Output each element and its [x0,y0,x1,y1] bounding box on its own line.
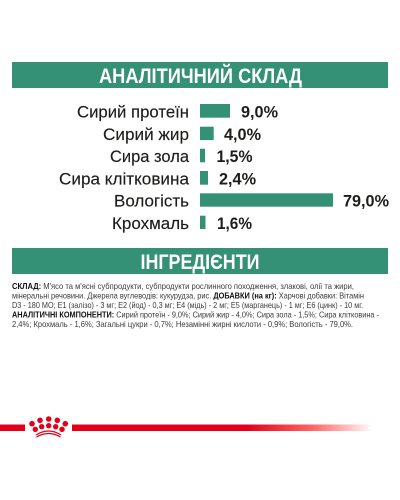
row: moisture [114,193,389,211]
row: crude fat [103,126,261,144]
heading: analytical composition: АНАЛІТИЧНИЙ СКЛАД [99,64,302,88]
row: crude protein: 9,0% [241,104,278,122]
row: crude ash: Сира зола [110,148,190,166]
row: starch [112,215,252,233]
row: crude protein: Сирий протеїн [77,104,189,122]
text block: composition details [12,282,379,329]
bar chart: composition [59,104,389,233]
row: crude fibre: Сира клітковина [59,170,190,188]
row: crude ash [110,148,253,166]
heading: ingredients [12,248,388,274]
row: crude ash: 1,5% [216,148,253,166]
row: crude fat: 4,0% [224,126,261,144]
row: starch: 1,6% [217,215,252,233]
text block: composition details: D3 - 180 МО; Е1 (залізо) - 3 мг; Е2 (йод) - 0,3 мг; Е4 (мідь) - 2 мг; Е5 (марганець) - 1 мг; Е6 (цинк) - 10 мг. [12,301,363,310]
footer red line [0,424,373,431]
icon: royal crown logo [29,416,68,437]
heading: analytical composition [12,62,388,88]
row: moisture: 79,0% [343,193,389,211]
row: crude fibre [59,170,256,188]
row: crude protein [77,104,278,122]
text block: composition details: мінеральні речовини. Джерела вуглеводів: кукурудза, рис. ДОБАВКИ (на кг): Харчові добавки: Вітамін [12,292,364,300]
text block: composition details: АНАЛІТИЧНІ КОМПОНЕНТИ: Сирий протеїн - 9,0%; Сирий жир - 4,0%; Сира зола - 1,5%; Сира клітковина - [12,310,379,320]
row: crude fibre: 2,4% [219,170,256,188]
row: crude fat: Сирий жир [103,126,189,144]
row: moisture: Вологість [114,193,189,211]
text block: composition details: 2,4%; Крохмаль - 1,6%; Загальні цукри - 0,7%; Незамінні жирні кислоти - 0,9%; Вологість - 79,0%. [12,320,353,329]
heading: ingredients: ІНГРЕДІЄНТИ [140,251,260,274]
row: starch: Крохмаль [112,215,189,233]
text block: composition details: СКЛАД: М'ясо та м'ясні субпродукти, субпродукти рослинного походження, злакові, олії та жири, [12,282,354,291]
